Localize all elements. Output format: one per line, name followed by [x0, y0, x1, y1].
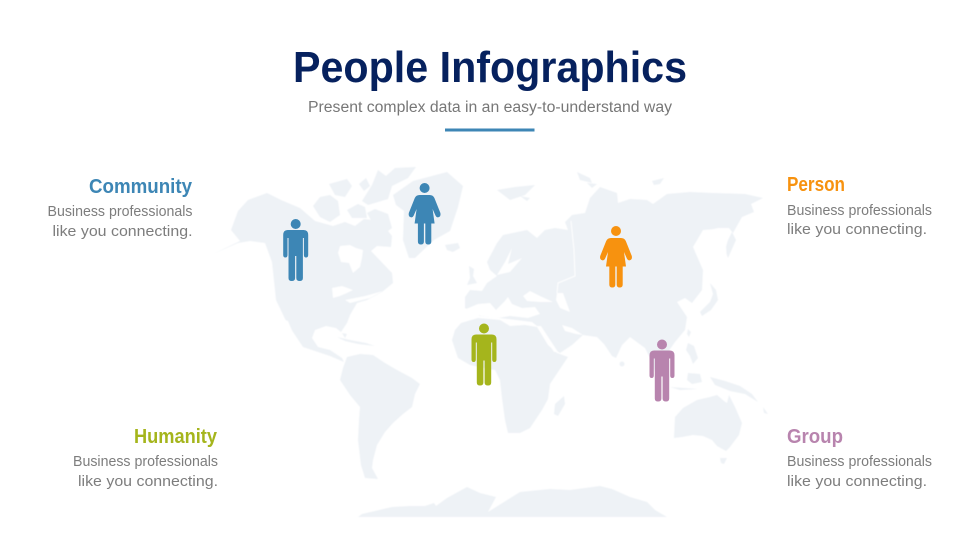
label: community: Business professionals [48, 203, 192, 220]
indonesia and philippines [670, 329, 768, 414]
label: community: Community [89, 176, 193, 198]
subtitle: Present complex data in an easy-to-understand way [308, 99, 672, 116]
label: community [48, 176, 193, 240]
label: group [787, 426, 932, 490]
icon: blue man [283, 219, 308, 281]
label: humanity: like you connecting. [78, 473, 218, 490]
japan [700, 283, 718, 316]
label: person: Business professionals [787, 202, 932, 219]
icon: orange woman [600, 226, 632, 288]
icon: green man [472, 324, 496, 386]
label: humanity: Business professionals [73, 453, 218, 470]
label: person: like you connecting. [787, 221, 927, 238]
uk and ireland [467, 266, 477, 285]
south america [340, 354, 420, 479]
urals line [557, 221, 575, 293]
madagascar [554, 396, 565, 416]
arctic islands [313, 167, 416, 234]
icon: blue woman [409, 183, 441, 244]
label: person: Person [787, 174, 845, 196]
cuba and caribbean [337, 333, 375, 346]
label: community: like you connecting. [52, 223, 192, 240]
iceland [445, 243, 460, 252]
title underline [445, 128, 534, 132]
label: humanity [73, 426, 218, 490]
antarctica [358, 486, 667, 517]
icon: purple man [650, 340, 674, 402]
sri lanka [620, 362, 624, 366]
sakhalin [725, 232, 736, 258]
label: group: Business professionals [787, 453, 932, 470]
label: person [787, 174, 932, 238]
world map [213, 167, 768, 517]
arctic russia islands [497, 172, 664, 201]
africa [452, 318, 568, 433]
greenland [393, 172, 463, 258]
north america [213, 193, 393, 362]
label: group: like you connecting. [787, 473, 927, 490]
eurasia [465, 187, 763, 372]
title: People Infographics [293, 43, 687, 92]
tasmania [720, 458, 727, 464]
label: group: Group [787, 426, 843, 448]
inland water [285, 228, 728, 352]
australia [674, 395, 742, 451]
label: humanity: Humanity [134, 426, 218, 448]
